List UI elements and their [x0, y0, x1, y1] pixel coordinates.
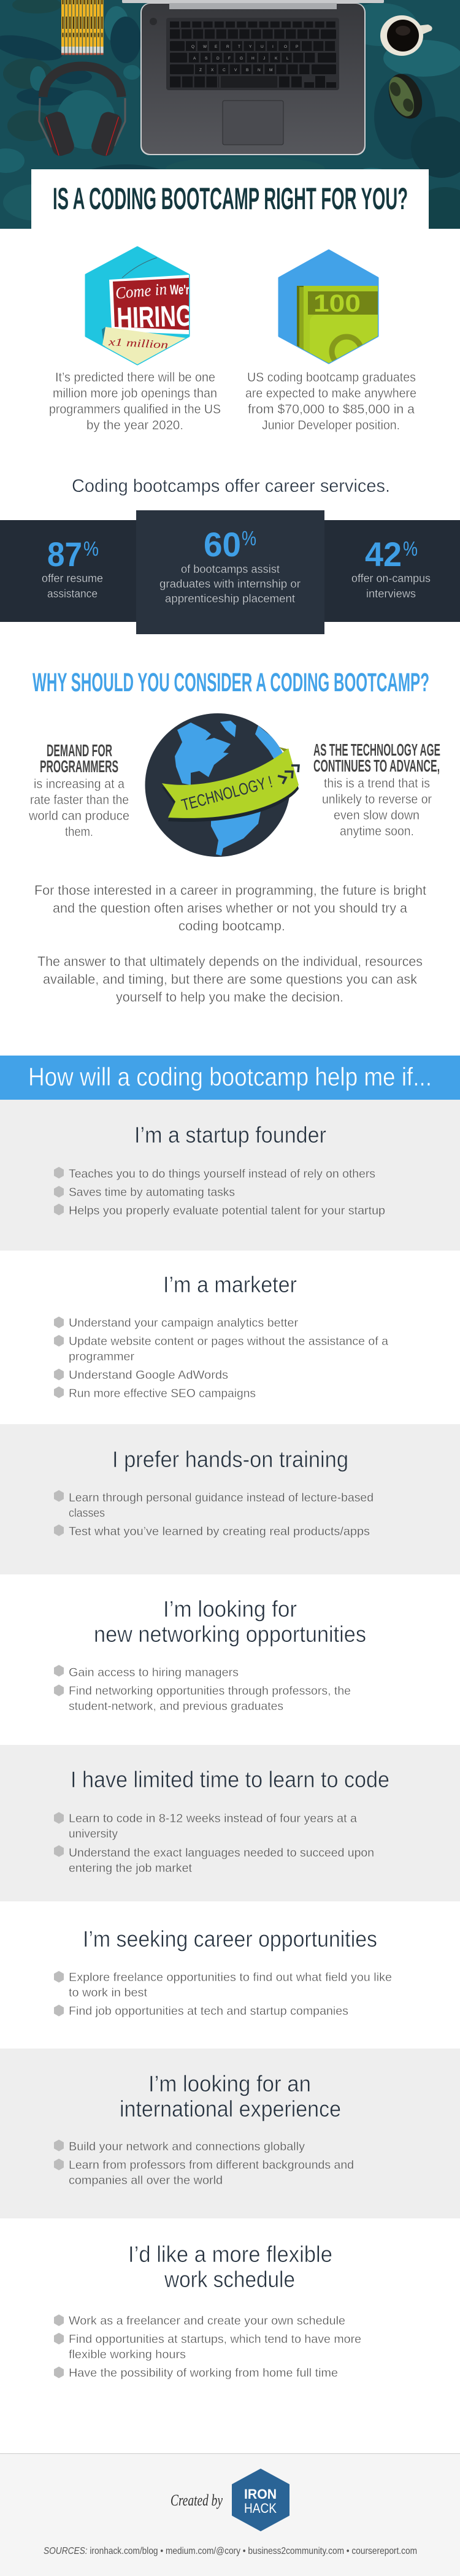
bullet list: Learn to code in 8-12 weeks instead of four years at a	[69, 1812, 357, 1825]
text: demand for programmers: world can produce	[28, 808, 129, 823]
heading: I’m looking for	[163, 1597, 297, 1622]
text: intro paragraphs: and the question often arises whether or not you should try a	[53, 900, 407, 916]
bullet list: Understand Google AdWords	[69, 1368, 228, 1382]
ribbon: TECHNOLOGY !	[180, 772, 274, 815]
sources: SOURCES: ironhack.com/blog • medium.com/@cory • business2community.com • coursereport.com	[44, 2546, 417, 2556]
bullet list	[54, 1665, 351, 1713]
created by: Created by	[171, 2491, 223, 2509]
text: salary: US coding bootcamp graduates	[247, 370, 416, 385]
icon: coffee cup	[380, 15, 432, 56]
text: technology age: unlikely to reverse or	[322, 792, 432, 807]
text: demand for programmers: is increasing at a	[34, 776, 125, 791]
bullet list	[54, 1490, 374, 1538]
bullet list: Have the possibility of working from home full time	[69, 2366, 338, 2380]
icon: hundred dollar bill hexagon: 100	[313, 290, 361, 317]
stat: 87 percent: %	[83, 537, 99, 560]
panel: salary stat	[245, 250, 416, 432]
bullet list: Run more effective SEO campaigns	[69, 1387, 256, 1400]
stat: 42 percent: interviews	[366, 588, 416, 600]
bullet list: Helps you properly evaluate potential talent for your startup	[69, 1204, 385, 1217]
bullet list: flexible working hours	[69, 2348, 186, 2361]
footer	[0, 2453, 460, 2576]
bullet list: Find job opportunities at tech and startup companies	[69, 2004, 348, 2018]
banner: how will a coding bootcamp help me	[0, 1056, 460, 1100]
text: salary	[245, 370, 416, 432]
trackpad	[223, 101, 283, 145]
heading: career services: Coding bootcamps offer career services.	[72, 476, 390, 496]
stat: 60 percent	[159, 525, 301, 605]
bullet list: Test what you’ve learned by creating real products/apps	[69, 1525, 370, 1538]
text: intro paragraphs: available, and timing, but there are some questions you can ask	[43, 972, 418, 987]
heading	[120, 2071, 341, 2122]
panel: networking opportunities	[0, 1574, 460, 1745]
icon: hiring sign hexagon	[86, 247, 194, 368]
title banner	[31, 169, 429, 229]
icon: hiring sign hexagon: Come in	[115, 280, 167, 302]
bullet list: Update website content or pages without the assistance of a	[69, 1335, 388, 1348]
heading: I’m a marketer	[163, 1272, 297, 1297]
keyboard: ZXCVBNM	[199, 68, 272, 72]
bullet list: Learn from professors from different backgrounds and	[69, 2158, 354, 2172]
text: job openings: million more job openings than	[53, 386, 217, 401]
icon: hiring sign hexagon: We're	[170, 282, 194, 297]
bullet list: Learn through personal guidance instead of lecture-based	[69, 1491, 374, 1505]
bullet list	[54, 2139, 354, 2187]
panel: limited time	[0, 1745, 460, 1901]
text: demand for programmers: PROGRAMMERS	[40, 757, 118, 776]
text: technology age: this is a trend that is	[324, 776, 430, 791]
bullet list: student-network, and previous graduates	[69, 1700, 283, 1713]
panel: career opportunities	[0, 1901, 460, 2049]
bullet list: companies all over the world	[69, 2174, 223, 2187]
panel: marketer	[0, 1251, 460, 1424]
bullet list: Understand the exact languages needed to succeed upon	[69, 1846, 374, 1860]
heading: new networking opportunities	[94, 1622, 366, 1647]
keyboard: ASDFGHJKL	[193, 56, 289, 61]
text: job openings: by the year 2020.	[86, 418, 183, 432]
stat: 87 percent: offer resume	[42, 572, 103, 585]
stat: 87 percent	[42, 535, 103, 600]
stat: 60 percent: 60	[204, 525, 241, 564]
keyboard: QWERTYUIOP	[191, 45, 298, 49]
bullet list	[54, 1812, 374, 1875]
heading: I’d like a more flexible	[128, 2242, 332, 2267]
bullet list	[54, 1167, 385, 1217]
heading: work schedule	[164, 2267, 295, 2292]
heading: I’m a startup founder	[134, 1122, 326, 1148]
text: job openings: It’s predicted there will be one	[55, 370, 215, 385]
bullet list: Saves time by automating tasks	[69, 1186, 235, 1199]
text: demand for programmers: rate faster than the	[30, 792, 129, 807]
icon: hiring sign hexagon: x1 million	[107, 335, 169, 351]
heading: I have limited time to learn to code	[71, 1767, 389, 1792]
ribbon	[162, 747, 299, 822]
illustration: globe with technology ribbon	[145, 713, 299, 857]
heading	[94, 1597, 366, 1647]
stat: 42 percent: %	[403, 537, 418, 560]
bullet list: Build your network and connections globally	[69, 2140, 305, 2153]
logo: Iron Hack hexagon: IRON	[244, 2486, 277, 2502]
bullet list: entering the job market	[69, 1861, 193, 1875]
panel: hands-on training	[0, 1424, 460, 1574]
text: intro paragraphs: The answer to that ultimately depends on the individual, resources	[37, 954, 423, 969]
panel: job openings stat	[49, 247, 221, 432]
bullet list	[54, 2314, 361, 2380]
panel: startup founder	[0, 1100, 460, 1251]
bullet list: to work in best	[69, 1986, 148, 1999]
bullet list	[54, 1316, 388, 1400]
icon: laptop	[122, 0, 384, 155]
heading: I prefer hands-on training	[112, 1447, 348, 1472]
stat: 87 percent: assistance	[47, 588, 98, 600]
text: salary: from $70,000 to $85,000 in a	[248, 402, 415, 416]
heading: I’m seeking career opportunities	[83, 1926, 377, 1952]
bullet list: Understand your campaign analytics better	[69, 1316, 299, 1330]
text: intro paragraphs	[34, 883, 427, 1005]
stat: 60 percent: of bootcamps assist	[181, 563, 280, 575]
logo: Iron Hack hexagon: HACK	[244, 2501, 277, 2516]
text: intro paragraphs: For those interested in a career in programming, the future is bright	[34, 883, 427, 898]
stat: 60 percent: graduates with internship or	[159, 578, 301, 590]
stat: 60 percent: %	[242, 527, 256, 550]
logo: Iron Hack hexagon	[232, 2469, 289, 2531]
text: technology age: even slow down	[334, 808, 420, 822]
bullet list: Find networking opportunities through professors, the	[69, 1684, 351, 1698]
stat: 42 percent	[351, 535, 431, 600]
hero: desk with laptop and accessories	[0, 0, 460, 236]
bullet list: programmer	[69, 1350, 135, 1363]
icon: headphones	[39, 66, 125, 158]
panel: career service stats	[0, 510, 460, 634]
bullet list: university	[69, 1827, 118, 1841]
heading: international experience	[120, 2096, 341, 2122]
text: job openings	[49, 370, 221, 432]
icon: hiring sign hexagon: HIRING	[117, 300, 193, 335]
keyboard	[166, 18, 339, 90]
panel: international experience	[0, 2049, 460, 2218]
text: job openings: programmers qualified in the US	[49, 402, 221, 416]
heading	[128, 2242, 332, 2292]
stat: 60 percent: apprenticeship placement	[165, 592, 295, 605]
bullet list: classes	[69, 1506, 105, 1520]
bullet list: Find opportunities at startups, which tend to have more	[69, 2333, 361, 2346]
text: demand for programmers	[28, 741, 129, 839]
panel: flexible work schedule	[0, 2218, 460, 2453]
heading: I’m looking for an	[148, 2071, 311, 2096]
text: demand for programmers: them.	[65, 824, 93, 839]
text: intro paragraphs: yourself to help you make the decision.	[116, 989, 343, 1005]
text: intro paragraphs: coding bootcamp.	[178, 918, 285, 933]
icon: hundred dollar bill hexagon	[278, 249, 379, 364]
text: technology age: anytime soon.	[340, 824, 414, 838]
stat: 87 percent: 87	[47, 535, 82, 573]
text: salary: are expected to make anywhere	[245, 386, 416, 401]
icon: camouflage mouse	[389, 74, 422, 119]
bullet list	[54, 1971, 392, 2018]
bullet list: Gain access to hiring managers	[69, 1666, 239, 1679]
icon: pencils	[61, 2, 104, 54]
text: demand for programmers: DEMAND FOR	[47, 741, 112, 760]
stat: 42 percent: 42	[365, 535, 402, 573]
stat: 42 percent: offer on-campus	[351, 572, 431, 585]
text: salary: Junior Developer position.	[262, 418, 400, 432]
bullet list: Work as a freelancer and create your own schedule	[69, 2314, 345, 2328]
bullet list: Teaches you to do things yourself instead of rely on others	[69, 1167, 375, 1181]
text: technology age	[313, 740, 440, 838]
bullet list: Explore freelance opportunities to find out what field you like	[69, 1971, 392, 1984]
